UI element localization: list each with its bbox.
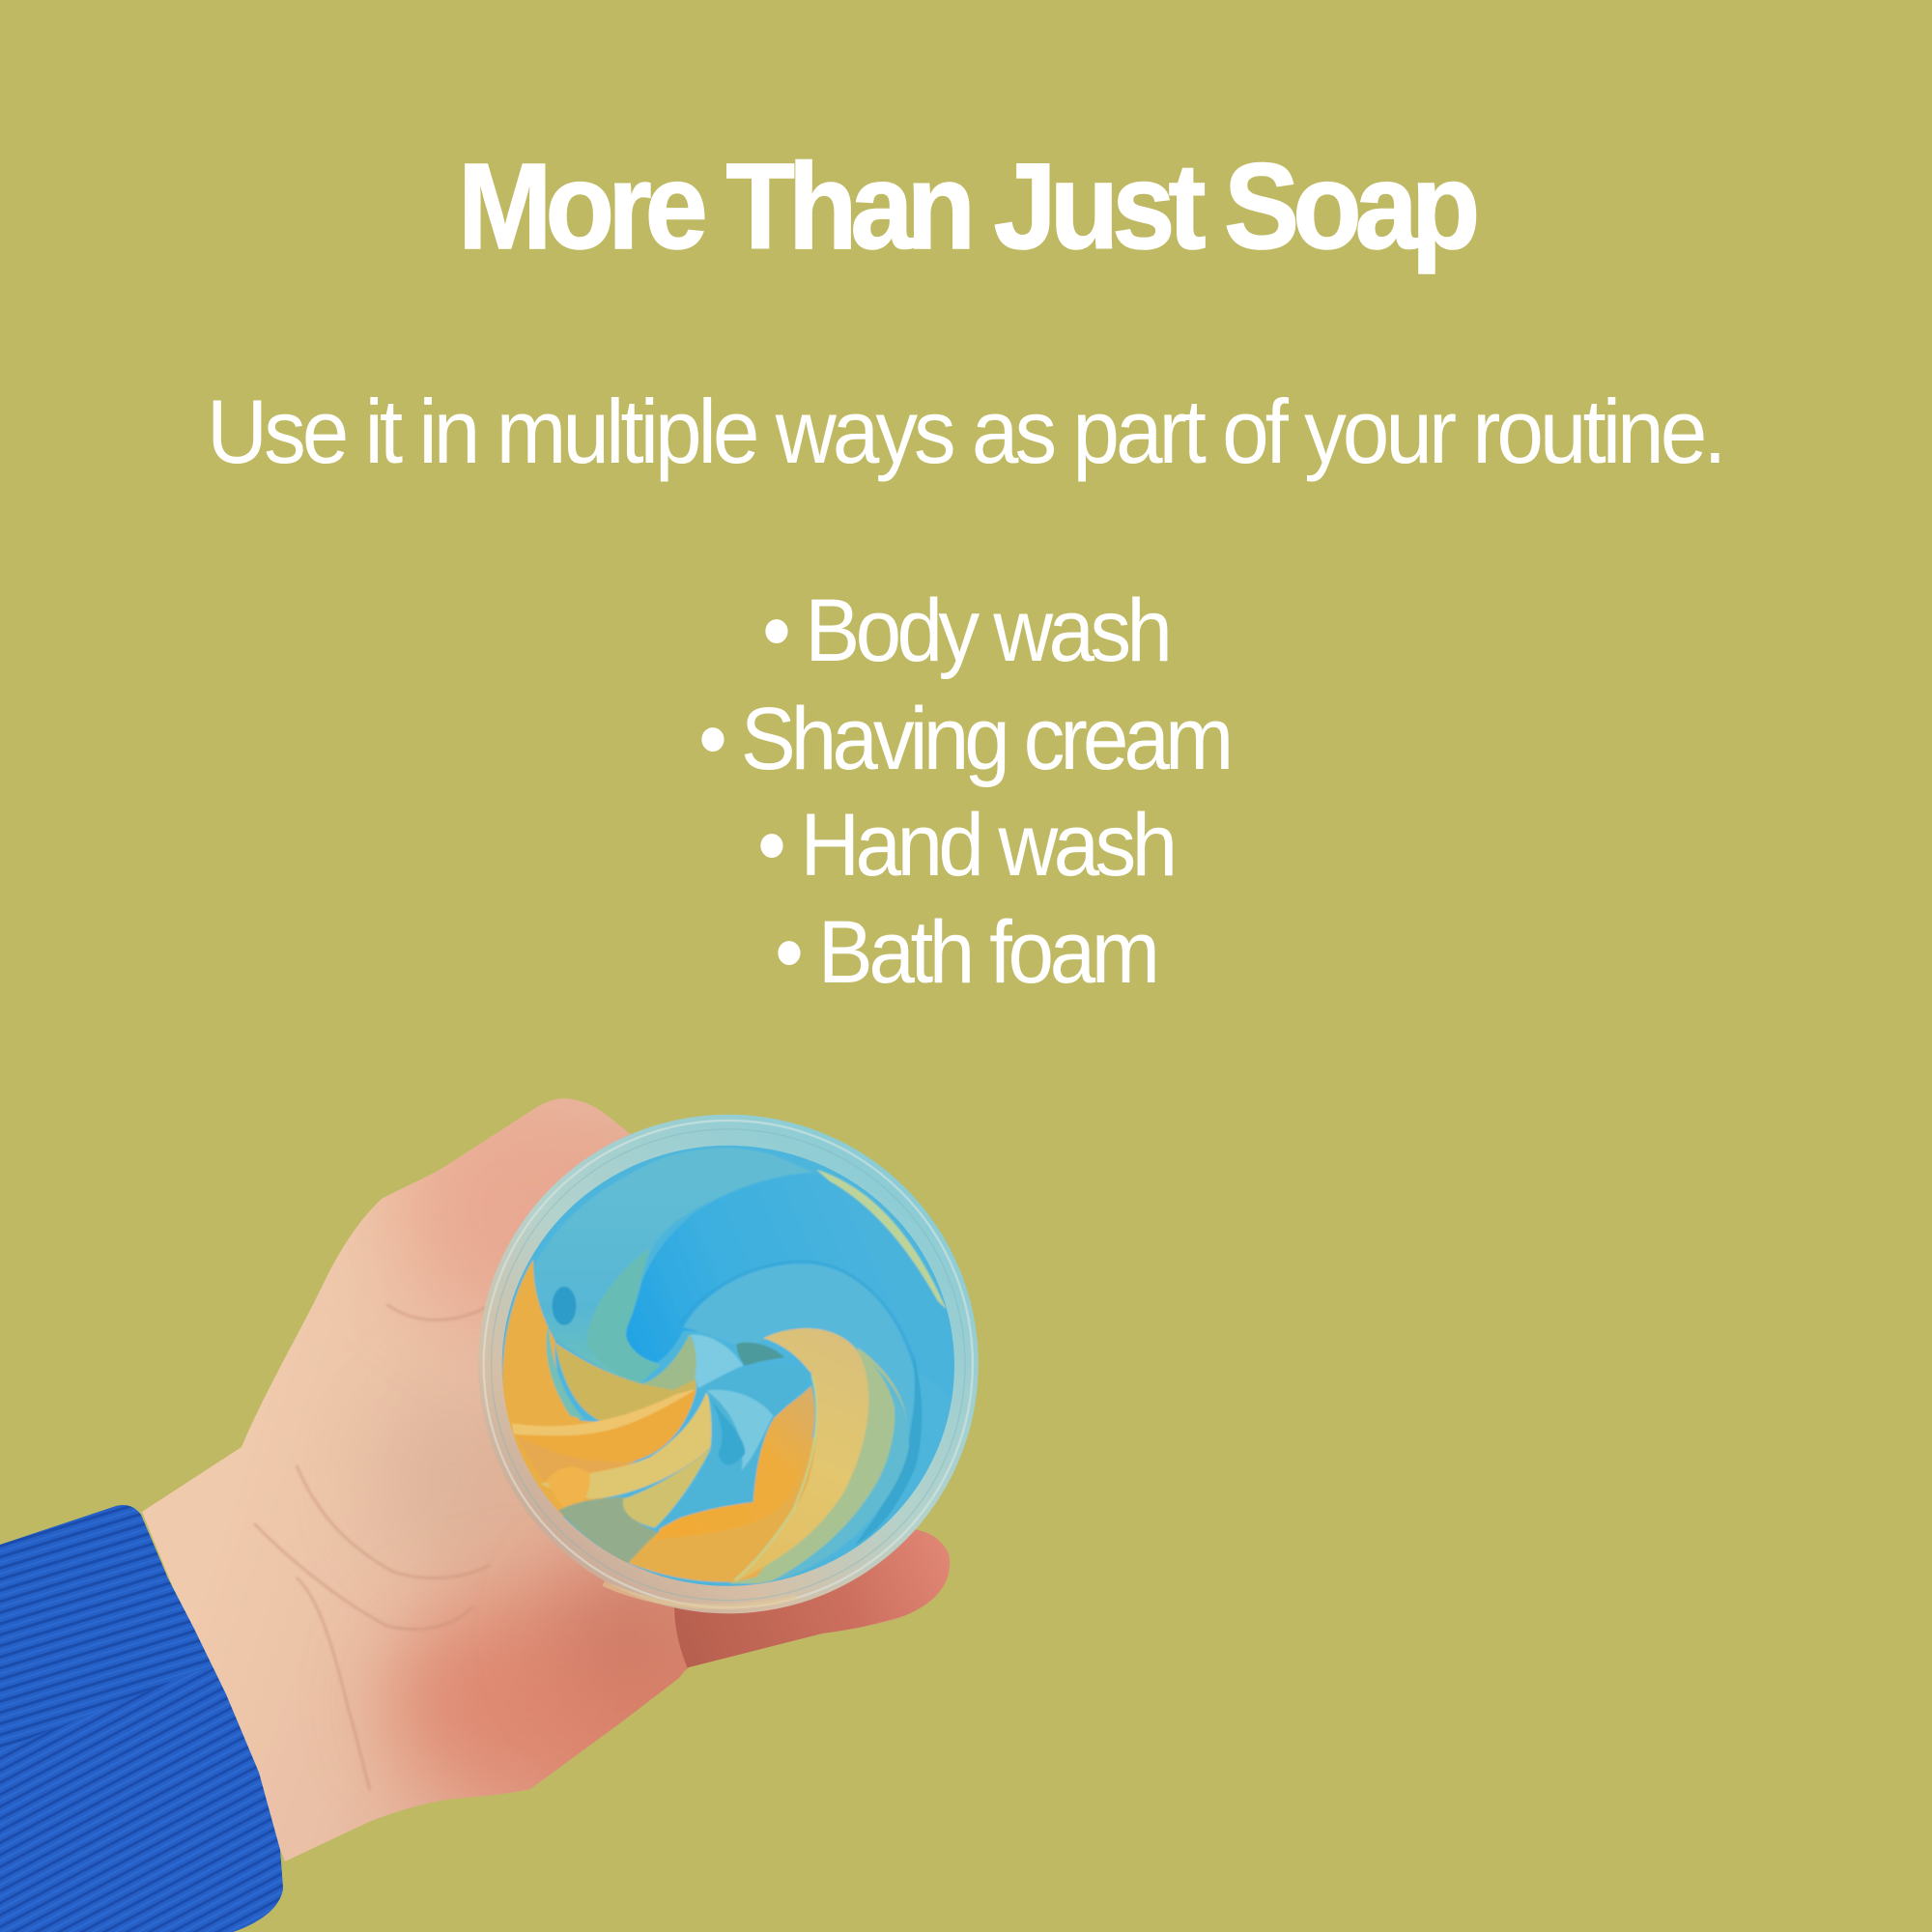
- cream: yellow lobe: [540, 1391, 712, 1499]
- palm creases: [254, 1304, 493, 1790]
- cream: center top petal: [690, 1334, 743, 1388]
- cream base: [497, 1141, 963, 1590]
- cream: far right shadow: [855, 1354, 922, 1546]
- cream: teal strip on orange: [546, 1327, 585, 1420]
- cream: crest line of inner band: [789, 1261, 913, 1362]
- title: More Than Just Soap: [458, 138, 1480, 274]
- swirl cream: [497, 1141, 963, 1590]
- cream: blue spot: [553, 1287, 576, 1325]
- list item: body wash: • Body wash: [762, 581, 1173, 680]
- list of uses: [698, 581, 1234, 1002]
- hand: [142, 1098, 951, 1861]
- cream: left orange mass: [502, 1260, 604, 1517]
- cream: center shadow: [713, 1403, 746, 1465]
- cream: yellow sliver: [623, 1447, 712, 1528]
- cream: lower-left grey-green: [558, 1497, 658, 1564]
- cream: orange lobe rim: [512, 1389, 696, 1435]
- sleeve: [0, 1505, 283, 1932]
- cream: green shadow in swirl: [586, 1248, 660, 1383]
- cream: teal crest on green band: [773, 1364, 909, 1580]
- cream: green crest: [641, 1335, 696, 1390]
- photo: hand holding jar: [0, 1063, 1014, 1932]
- jar: [478, 1115, 979, 1613]
- cream: orange lobe: [602, 1388, 697, 1463]
- list item: hand wash: • Hand wash: [757, 795, 1178, 895]
- cream: olive fold: [555, 1334, 696, 1423]
- cream: right yellow band: [735, 1328, 868, 1582]
- cream: top-left teal swirl: [534, 1148, 813, 1384]
- cream: dark pocket: [736, 1343, 784, 1366]
- cream: center blue star: [681, 1372, 811, 1519]
- list item: shaving cream: • Shaving cream: [698, 689, 1234, 788]
- cream: right rim pale highlight: [816, 1170, 946, 1309]
- cream: center highlight: [706, 1390, 773, 1470]
- cream: bottom orange band: [628, 1434, 830, 1582]
- cream: green band: [730, 1348, 909, 1583]
- cream: upper blue band: [626, 1179, 850, 1362]
- cream: pale crest line: [735, 1376, 817, 1580]
- cream: middle orange band: [656, 1385, 814, 1540]
- subtitle: Use it in multiple ways as part of your routine.: [207, 382, 1727, 483]
- cream: orange lower fill: [517, 1435, 637, 1481]
- list item: bath foam: • Bath foam: [775, 902, 1160, 1002]
- jar rim: [478, 1115, 979, 1613]
- cream: orange tip: [548, 1467, 591, 1498]
- cream: inner blue band: [683, 1264, 914, 1427]
